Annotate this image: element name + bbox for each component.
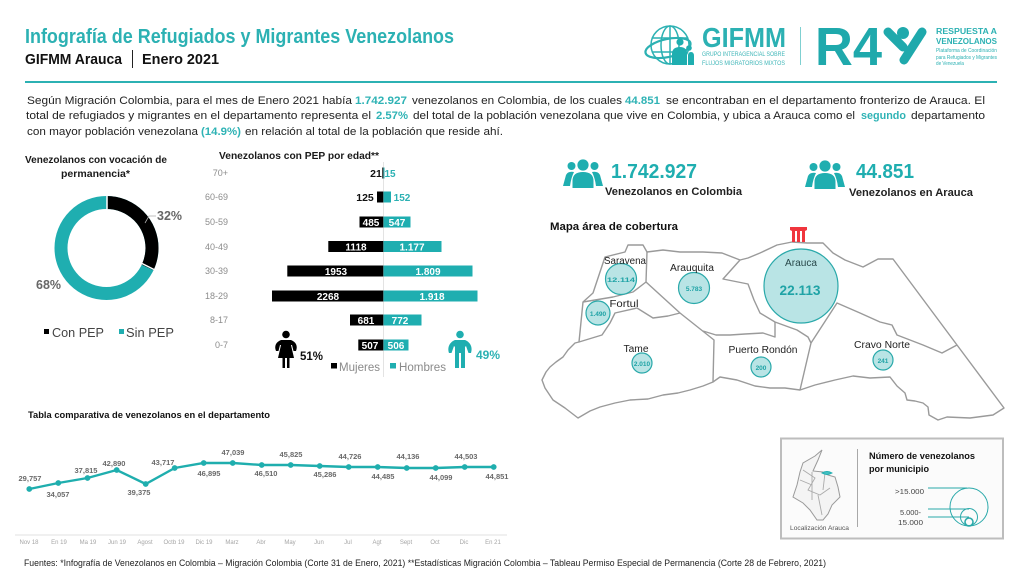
age labels: 40-49 xyxy=(205,242,228,252)
icon: people xyxy=(805,160,845,189)
axis labels: Sept xyxy=(400,540,413,546)
axis labels: Jun xyxy=(314,540,324,546)
logo: respuesta a venezolanos: RESPUESTA A xyxy=(936,27,997,36)
panel: map xyxy=(542,221,1004,420)
bubble: Tame: 2.010 xyxy=(634,361,651,368)
header subtitle xyxy=(25,50,219,68)
pyramid legend: Mujeres xyxy=(339,362,380,374)
header title: Infografía de Refugiados y Migrantes Venezolanos xyxy=(25,26,454,48)
legend heading: por municipio xyxy=(869,464,930,474)
icon: people xyxy=(563,159,603,188)
intro paragraph: Según Migración Colombia, para el mes de Enero 2021 había xyxy=(27,95,353,107)
donut legend: Con PEP xyxy=(52,325,104,340)
stat label: Venezolanos en Colombia xyxy=(605,186,743,198)
logo: respuesta a venezolanos: Plataforma de Coordinación xyxy=(936,48,997,54)
intro paragraph: se encontraban en el departamento fronterizo de Arauca. El xyxy=(666,95,985,107)
bar values: 485 xyxy=(363,218,380,229)
intro paragraph: total de refugiados y migrantes en el departamento representa el xyxy=(26,110,371,122)
bubble: Saravena: Saravena xyxy=(604,256,646,267)
bubble: Fortul: Fortul xyxy=(610,299,638,310)
header rule xyxy=(25,81,997,83)
panel: donut chart xyxy=(25,154,182,340)
bubble: Tame: Tame xyxy=(624,344,649,355)
data labels: 44,485 xyxy=(372,472,394,481)
bar values: 681 xyxy=(358,316,375,327)
bar values: 772 xyxy=(392,316,409,327)
data labels: 42,890 xyxy=(103,459,125,468)
axis labels: Abr xyxy=(256,540,266,546)
stat value: 44.851 xyxy=(856,161,914,183)
bars: hombres xyxy=(384,168,478,350)
data labels: 47,039 xyxy=(222,448,244,457)
donut heading: permanencia* xyxy=(61,168,131,180)
axis labels: Ma 19 xyxy=(80,540,97,546)
data labels xyxy=(19,448,508,499)
age labels: 60-69 xyxy=(205,192,228,202)
axis labels: Dic xyxy=(460,540,468,546)
stat: Colombia xyxy=(563,159,743,198)
data labels: 44,851 xyxy=(486,472,508,481)
chart axis xyxy=(15,534,507,536)
intro paragraph: con mayor población venezolana xyxy=(27,126,199,138)
pyramid heading: Venezolanos con PEP por edad** xyxy=(219,150,380,162)
men percent: 49% xyxy=(476,350,500,362)
data labels: 45,825 xyxy=(280,450,302,459)
axis labels: Dic 19 xyxy=(195,540,213,546)
bar values xyxy=(317,168,445,352)
axis labels: Oct xyxy=(430,540,440,546)
logo: respuesta a venezolanos: de Venezuela xyxy=(936,61,964,67)
legend size scale: 15.000 xyxy=(898,518,923,527)
women percent: 51% xyxy=(300,349,323,363)
age labels: 0-7 xyxy=(215,340,228,350)
donut legend: Sin PEP xyxy=(126,325,174,340)
bubble: Tame xyxy=(624,344,652,373)
bars: mujeres xyxy=(272,168,383,350)
bar values: 21 xyxy=(370,168,382,180)
logo: respuesta a venezolanos: para Refugiados y Migrantes xyxy=(936,55,997,61)
data labels: 46,510 xyxy=(255,469,277,478)
axis labels: Marz xyxy=(225,540,239,546)
bubble: Cravo Norte: 241 xyxy=(878,358,889,365)
data labels: 44,726 xyxy=(339,452,361,461)
bar values: 1.918 xyxy=(419,292,445,303)
intro paragraph: departamento xyxy=(911,110,985,122)
legend heading xyxy=(869,451,975,474)
icon: man xyxy=(448,331,472,368)
bubble: Cravo Norte xyxy=(854,340,910,370)
bubble: Arauquita: 5.783 xyxy=(686,286,703,293)
logo: GIFMM xyxy=(644,22,786,67)
bubble: Saravena: 12.114 xyxy=(607,277,636,284)
axis labels: May xyxy=(284,540,296,546)
bar values: 152 xyxy=(394,193,411,204)
map heading: Mapa área de cobertura xyxy=(550,221,679,233)
bubble: Arauca xyxy=(764,249,838,323)
data labels: 39,375 xyxy=(128,488,150,497)
intro paragraph: venezolanos en Colombia, de los cuales xyxy=(412,95,623,107)
axis labels: Jun 19 xyxy=(108,540,127,546)
donut labels xyxy=(36,209,182,292)
bar values: 1118 xyxy=(345,242,367,254)
axis labels: Octb 19 xyxy=(163,540,185,546)
bubble: Fortul: 1.490 xyxy=(590,311,607,318)
intro paragraph: 2.57% xyxy=(376,110,408,122)
age labels: 8-17 xyxy=(210,315,228,325)
panel: age pyramid xyxy=(205,150,500,377)
axis labels: Jul xyxy=(344,540,352,546)
bar values: 1.809 xyxy=(415,267,441,278)
legend heading: Número de venezolanos xyxy=(869,451,975,461)
axis labels xyxy=(19,540,501,546)
axis labels: Agt xyxy=(372,540,382,546)
donut labels: 32% xyxy=(157,209,182,223)
trend line xyxy=(26,460,497,492)
bar values: 125 xyxy=(356,192,374,204)
legend size scale: 5.000- xyxy=(900,508,921,517)
data labels: 44,136 xyxy=(397,452,419,461)
data labels: 34,057 xyxy=(47,490,69,499)
locator map of Colombia xyxy=(790,450,850,532)
footer sources: Fuentes: *Infografía de Venezolanos en Colombia – Migración Colombia (Corte 31 de Enero, 2021) **Estadísticas Migración Colombia – Tableau Permiso Especial de Permanencia (Corte 28 de Febrero, 2021) xyxy=(24,558,826,568)
age labels: 70+ xyxy=(213,168,228,178)
header subtitle: GIFMM Arauca xyxy=(25,51,123,68)
pyramid legend xyxy=(331,362,446,374)
intro paragraph xyxy=(26,95,985,138)
icon: border bridge xyxy=(790,227,807,242)
bar values: 547 xyxy=(389,218,406,229)
bubble: Puerto Rondón xyxy=(728,345,798,377)
donut heading: Venezolanos con vocación de xyxy=(25,154,167,166)
bar values: 1953 xyxy=(325,267,348,278)
bubble: Puerto Rondón: Puerto Rondón xyxy=(728,345,798,356)
pyramid legend: Hombres xyxy=(399,362,446,374)
intro paragraph: segundo xyxy=(861,110,906,122)
age labels: 30-39 xyxy=(205,266,228,276)
data labels: 44,503 xyxy=(455,452,477,461)
logo: GIFMM: GIFMM xyxy=(702,22,786,53)
axis labels: En 19 xyxy=(51,540,67,546)
intro paragraph: en relación al total de la población que reside ahí. xyxy=(245,126,503,138)
age labels xyxy=(205,168,228,350)
axis labels: Nov 18 xyxy=(19,540,39,546)
data labels: 29,757 xyxy=(19,474,41,483)
legend size scale xyxy=(895,487,988,527)
bubble: Cravo Norte: Cravo Norte xyxy=(854,340,910,351)
bubble: Arauquita: Arauquita xyxy=(670,263,714,274)
age labels: 18-29 xyxy=(205,291,228,301)
age labels: 50-59 xyxy=(205,217,228,227)
intro paragraph: (14.9%) xyxy=(201,126,241,138)
logo divider xyxy=(800,27,801,65)
logo: R4V xyxy=(815,17,922,77)
line chart heading: Tabla comparativa de venezolanos en el departamento xyxy=(28,410,270,421)
intro paragraph: 1.742.927 xyxy=(355,95,407,107)
panel: map legend xyxy=(781,438,1003,538)
data labels: 46,895 xyxy=(198,469,220,478)
data labels: 45,286 xyxy=(314,470,336,479)
logo: R4V: R4 xyxy=(815,17,882,77)
bar values: 507 xyxy=(362,341,379,352)
bar values: 506 xyxy=(388,341,405,352)
data labels: 44,099 xyxy=(430,473,452,482)
bar values: 15 xyxy=(384,169,396,180)
bar values: 1.177 xyxy=(399,242,425,254)
axis labels: En 21 xyxy=(485,540,501,546)
intro paragraph: 44.851 xyxy=(625,95,660,107)
header subtitle: Enero 2021 xyxy=(142,51,219,68)
intro paragraph: del total de la población venezolana que vive en Colombia, y ubica a Arauca como el xyxy=(413,110,855,122)
stat: Arauca xyxy=(805,160,974,199)
donut heading xyxy=(25,154,167,180)
bubble: Arauca: Arauca xyxy=(785,258,817,269)
data labels: 43,717 xyxy=(152,458,174,467)
bubble: Saravena xyxy=(604,256,646,294)
axis labels: Agost xyxy=(137,540,153,546)
logo: respuesta a venezolanos: VENEZOLANOS xyxy=(936,37,998,46)
logo: GIFMM: FLUJOS MIGRATORIOS MIXTOS xyxy=(702,61,785,67)
data labels: 37,815 xyxy=(75,466,97,475)
logo: respuesta a venezolanos xyxy=(936,27,998,67)
pyramid axis xyxy=(383,162,384,377)
icon: woman xyxy=(275,331,297,368)
bubble: Fortul xyxy=(586,299,638,325)
logo: GIFMM: GRUPO INTERAGENCIAL SOBRE xyxy=(702,52,785,58)
legend divider xyxy=(857,449,858,527)
donut labels: 68% xyxy=(36,278,61,292)
donut ring xyxy=(61,195,155,294)
bubble: Arauca: 22.113 xyxy=(780,283,821,298)
panel: line chart xyxy=(15,410,508,546)
bubble: Puerto Rondón: 200 xyxy=(756,365,767,372)
locator map of Colombia: Localización Arauca xyxy=(790,526,850,532)
map outline xyxy=(542,242,1004,420)
stat value: 1.742.927 xyxy=(611,161,697,183)
bubble: Arauquita xyxy=(670,263,714,304)
bar values: 2268 xyxy=(317,292,340,303)
stat label: Venezolanos en Arauca xyxy=(849,187,974,199)
legend size scale: >15.000 xyxy=(895,487,924,496)
donut legend xyxy=(44,325,174,340)
